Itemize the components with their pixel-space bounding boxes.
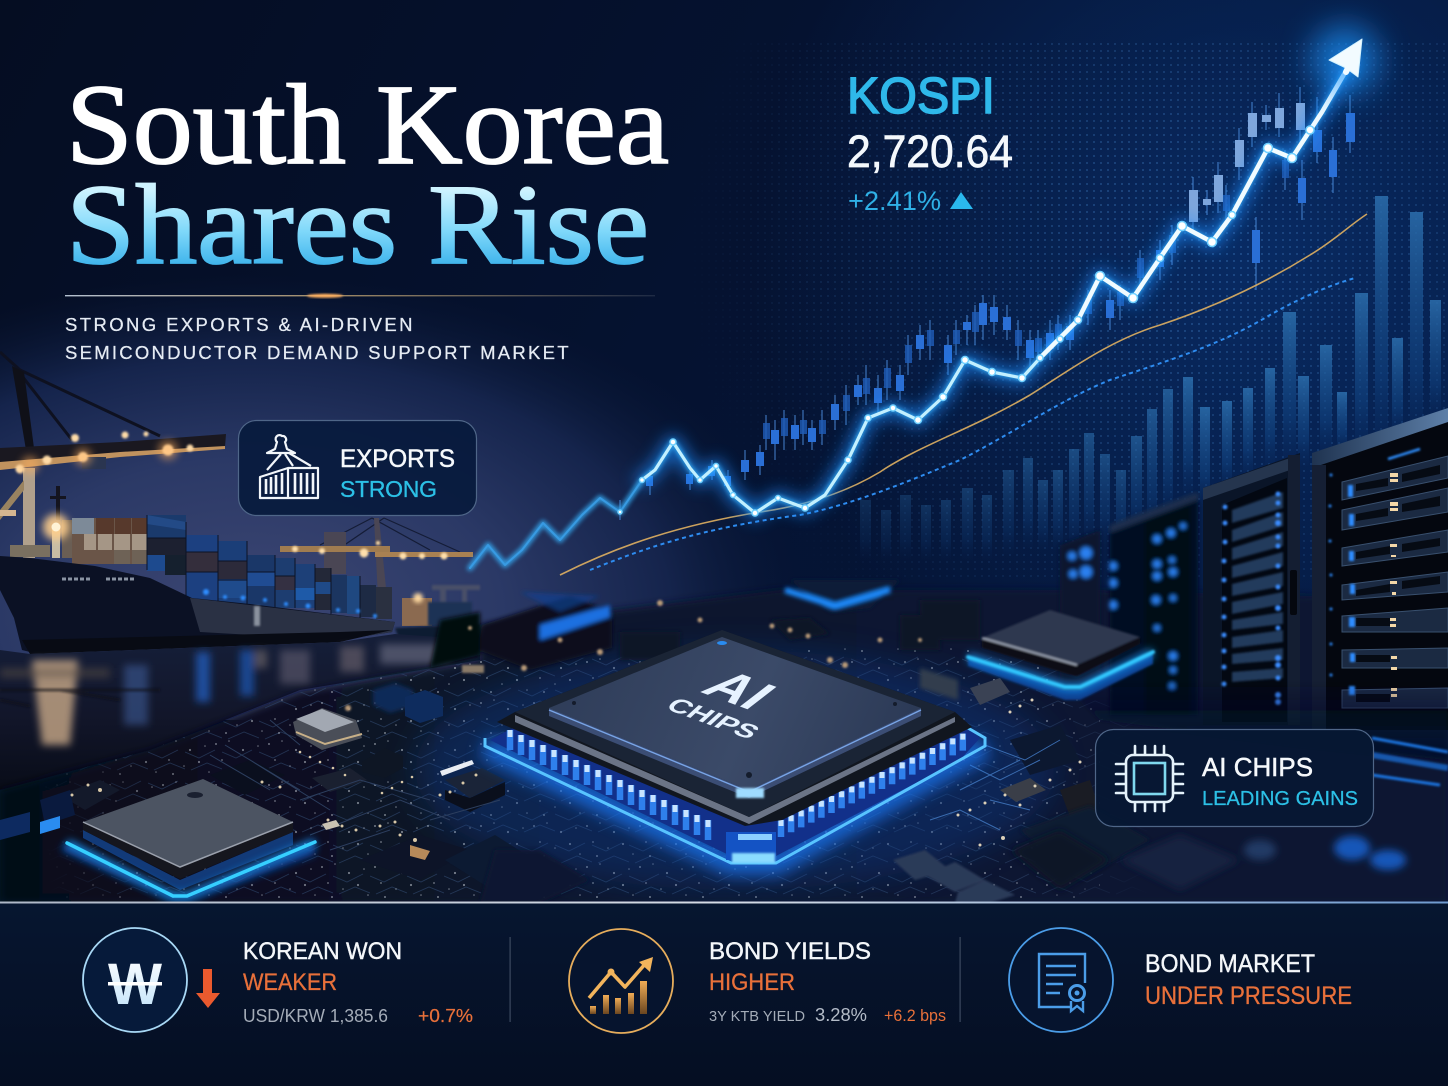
moving-average lines (560, 214, 1367, 575)
subtitle: SEMICONDUCTOR DEMAND SUPPORT MARKET (65, 342, 571, 363)
metric: Korean won: WEAKER (243, 969, 337, 996)
metric: bond market: UNDER PRESSURE (1145, 982, 1352, 1010)
metric: bond yields (569, 929, 946, 1033)
icon: down arrow (196, 969, 220, 1008)
subtitle (65, 314, 571, 363)
callout: AI chips leading gains: AI CHIPS (1202, 752, 1313, 782)
circuit board surface (0, 580, 1448, 903)
blurred foreground squares (1010, 830, 1406, 890)
blue capacitor (405, 690, 443, 723)
far blurred components (373, 580, 980, 713)
icon: won circle (83, 928, 187, 1032)
saturated candle bodies (646, 113, 1355, 486)
headline: South Korea (66, 61, 669, 188)
ship superstructure (10, 486, 82, 558)
icon: bond certificate (1009, 928, 1113, 1032)
bottom notch bars (726, 832, 776, 860)
background bar chart (860, 196, 1441, 560)
main AI chip (485, 630, 985, 863)
KOSPI readout (847, 67, 1013, 216)
KOSPI readout: 2,720.64 (847, 126, 1013, 177)
front rack (1312, 408, 1448, 730)
near components right of main chip (893, 678, 1150, 903)
ship hull (0, 556, 395, 654)
icon: microchip (1116, 746, 1183, 811)
chip label: AI (690, 662, 789, 718)
headline: Shares Rise (66, 161, 649, 288)
server racks (1060, 408, 1448, 785)
metric: bond yields: BOND YIELDS (709, 938, 871, 965)
small chip right (968, 610, 1153, 700)
chip top plate (549, 637, 921, 790)
candlestick wicks (620, 87, 1350, 520)
callout: AI chips leading gains (1096, 730, 1374, 826)
chip label: CHIPS (660, 693, 766, 743)
chip light (736, 788, 764, 798)
divider (510, 937, 511, 1022)
icon: won circle: W (108, 952, 162, 1017)
divider under headline (65, 294, 655, 298)
chip frame (497, 630, 972, 826)
KOSPI readout: KOSPI (847, 67, 995, 124)
glow outline (485, 728, 985, 863)
metric: Korean won: KOREAN WON (243, 938, 402, 965)
pins (510, 730, 708, 840)
dim candle bodies (763, 160, 1289, 439)
metric: Korean won: +0.7% (418, 1006, 473, 1026)
metric: bond market (1009, 928, 1352, 1032)
bottom panel (0, 902, 1448, 1086)
callout: exports strong: EXPORTS (340, 445, 455, 473)
metric: bond yields: 3.28% (815, 1005, 867, 1025)
icon: rising gold chart (569, 929, 673, 1033)
KOSPI readout: +2.41% (848, 186, 941, 216)
chip label (660, 662, 789, 743)
bright candle bodies (1189, 103, 1305, 222)
background cranes (280, 518, 480, 642)
chip base frame (490, 630, 980, 856)
water and reflections (0, 634, 480, 790)
small chip left (60, 779, 315, 902)
quay crane (0, 352, 226, 558)
subtitle: STRONG EXPORTS & AI-DRIVEN (65, 314, 415, 335)
candlestick chart (620, 87, 1355, 520)
far racks, blurred (1060, 492, 1198, 715)
warm bokeh components (345, 600, 922, 711)
middle rack (1203, 453, 1300, 725)
chip glow (485, 746, 985, 863)
near components left (0, 708, 590, 903)
metric: bond yields: 3Y KTB YIELD (709, 1008, 805, 1025)
callout: AI chips leading gains: LEADING GAINS (1202, 787, 1358, 810)
metric: Korean won (83, 928, 473, 1032)
metric: Korean won: USD/KRW 1,385.6 (243, 1006, 388, 1026)
callout: exports strong: STRONG (340, 476, 437, 502)
headline (66, 61, 669, 288)
rack floor (1060, 680, 1448, 760)
metric: bond yields: +6.2 bps (884, 1006, 946, 1025)
metric: bond yields: HIGHER (709, 969, 795, 996)
callout: exports strong (238, 420, 476, 516)
metric: bond market: BOND MARKET (1145, 950, 1315, 978)
up triangle (950, 192, 973, 209)
main KOSPI rising line with arrow (470, 26, 1379, 568)
container stacks (72, 515, 392, 619)
icon: container on crane hook (260, 435, 318, 498)
port scene: cranes, container ship and water (0, 352, 480, 790)
divider (960, 937, 961, 1022)
